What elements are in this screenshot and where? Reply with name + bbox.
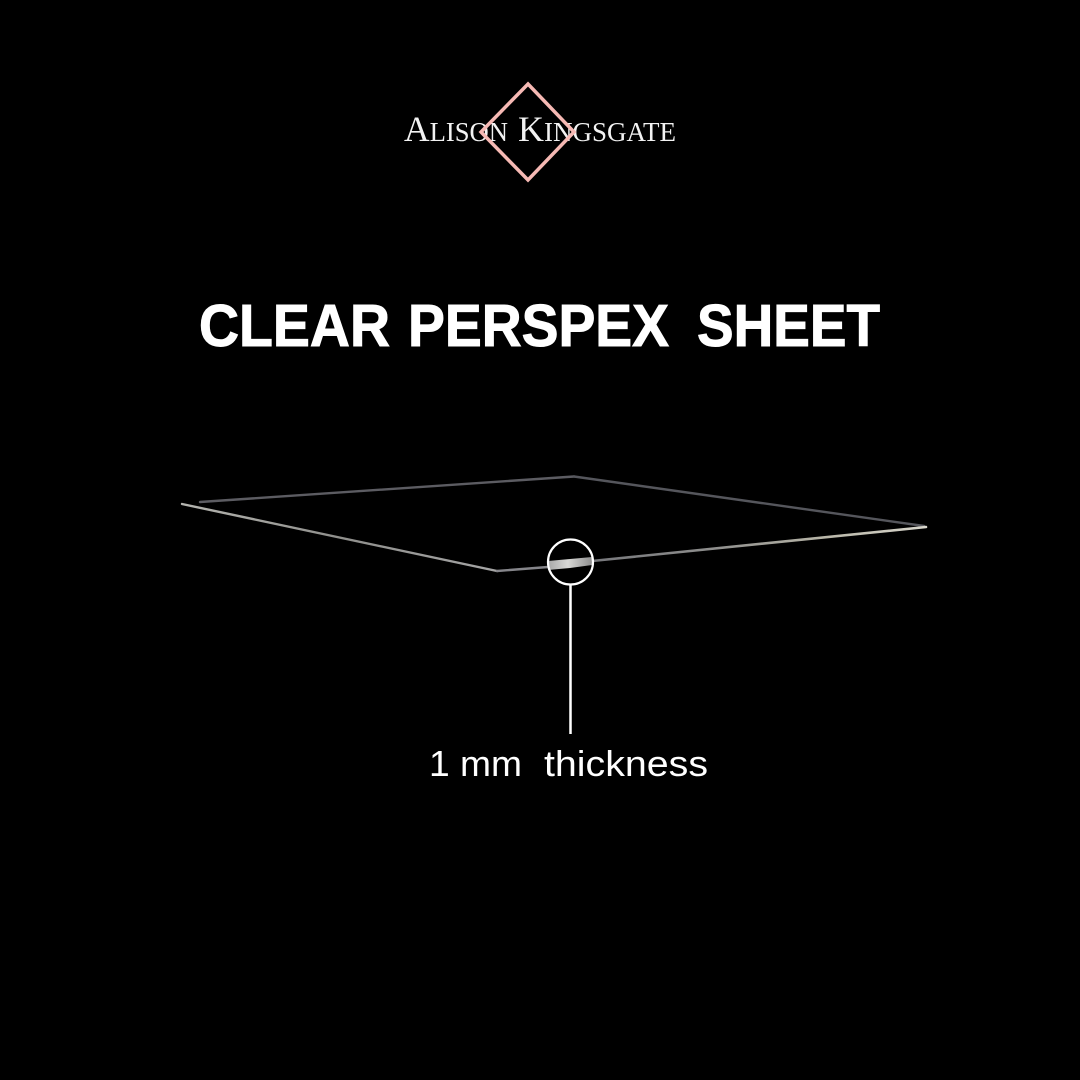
logo wordmark: KINGSGATE [518, 109, 676, 149]
callout label [429, 743, 708, 784]
back left edge [200, 476, 574, 502]
magnified edge band [548, 557, 592, 570]
callout circle [548, 540, 593, 584]
title: SHEET [697, 293, 880, 359]
icon: pink diamond [481, 84, 574, 180]
title [199, 293, 880, 359]
front left edge [182, 504, 497, 571]
logo wordmark [404, 109, 676, 149]
logo: Alison Kingsgate [404, 84, 676, 180]
callout label: thickness [544, 743, 708, 784]
callout: thickness marker [548, 540, 593, 734]
front right edge [497, 567, 548, 571]
callout label: 1 mm [429, 743, 522, 784]
title: CLEAR [199, 293, 390, 359]
logo wordmark: ALISON [404, 109, 508, 149]
title: PERSPEX [408, 293, 669, 359]
callout line [569, 585, 572, 734]
perspex sheet illustration [182, 476, 926, 571]
back right edge [574, 476, 924, 526]
